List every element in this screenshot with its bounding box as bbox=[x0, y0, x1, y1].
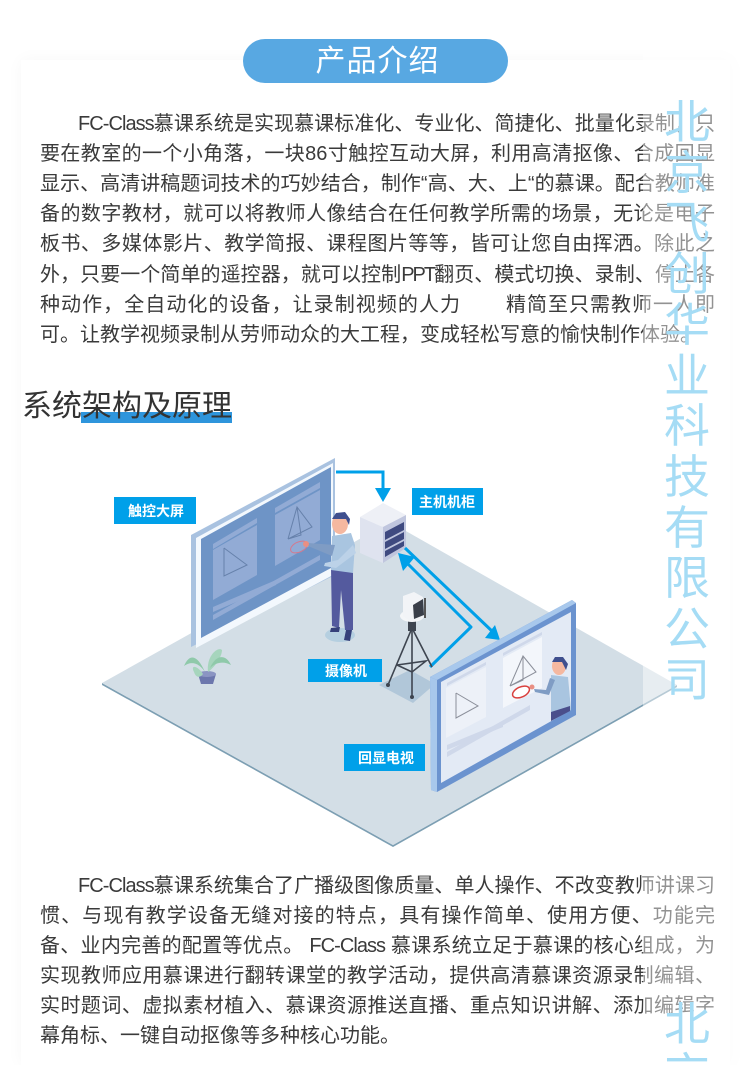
text block: system features bbox=[40, 874, 715, 1047]
watermark: vertical company name: 司 bbox=[664, 654, 710, 706]
text block: system features: 备、业内完善的配置等优点。 FC-Class 慕课系统立足于慕课的核心组成，为 bbox=[40, 935, 715, 957]
text block: product introduction: 要在教室的一个小角落，一块86寸触控互动大屏，利用高清抠像、合成回显 bbox=[40, 143, 715, 165]
text block: product introduction: 可。让教学视频录制从劳师动众的大工程，变成轻松写意的愉快制作体验。 bbox=[40, 324, 700, 346]
text block: system features: 惯、与现有教学设备无缝对接的特点，具有操作简单、使用方便、功能完 bbox=[40, 905, 715, 927]
label: host cabinet bbox=[412, 488, 483, 515]
text block: product introduction: 精简至只需教师一人即 bbox=[506, 294, 715, 316]
text block: system features: 幕角标、一键自动抠像等多种核心功能。 bbox=[40, 1025, 400, 1047]
touch screen board bbox=[191, 458, 335, 648]
text block: system features: 实现教师应用慕课进行翻转课堂的教学活动，提供高清慕课资源录制编辑、 bbox=[40, 965, 715, 987]
watermark: vertical company name: 科 bbox=[664, 400, 710, 452]
text block: product introduction: 种动作，全自动化的设备，让录制视频的人力 bbox=[40, 294, 460, 316]
label: touch screen: 触控大屏 bbox=[128, 503, 184, 519]
text block: product introduction: 显示、高清讲稿题词技术的巧妙结合，制作“高、大、上“的慕课。配合教师准 bbox=[40, 173, 715, 195]
label: host cabinet: 主机机柜 bbox=[419, 494, 475, 510]
label: display TV: 回显电视 bbox=[358, 750, 414, 766]
heading pill: product introduction: 产品介绍 bbox=[316, 45, 440, 78]
text block: system features: 实时题词、虚拟素材植入、慕课资源推送直播、重点知识讲解、添加编辑字 bbox=[40, 995, 715, 1017]
heading: system architecture and principle: 系统架构及原理 bbox=[22, 390, 232, 423]
label: display TV bbox=[344, 744, 425, 771]
text block: product introduction: 板书、多媒体影片、教学简报、课程图片等等，皆可让您自由挥洒。除此之 bbox=[40, 233, 715, 255]
watermark: vertical company name: 京 bbox=[664, 147, 710, 199]
heading underline highlight bbox=[81, 412, 232, 423]
camera on tripod bbox=[379, 592, 435, 703]
heading pill: product introduction bbox=[243, 39, 508, 83]
watermark: vertical company name: 华 bbox=[664, 299, 710, 351]
server cabinet bbox=[360, 503, 406, 563]
text block: product introduction: 外，只要一个简单的遥控器，就可以控制PPT翻页、模式切换、录制、停止各 bbox=[40, 264, 715, 286]
watermark: vertical company name: 业 bbox=[664, 350, 710, 402]
watermark: vertical company name: 飞 bbox=[664, 197, 710, 249]
arrows: server, camera and TV links bbox=[398, 548, 500, 667]
translucent fade strip on the right bbox=[643, 0, 750, 1065]
watermark: vertical company name: 限 bbox=[664, 552, 710, 604]
floor bbox=[102, 522, 677, 847]
teacher figure bbox=[303, 512, 356, 642]
arrow: board to server bbox=[336, 472, 391, 502]
label: touch screen bbox=[114, 497, 196, 524]
label: camera bbox=[308, 659, 382, 682]
watermark: vertical company name: 创 bbox=[664, 248, 710, 300]
watermark: repeated start of company name: 北 bbox=[664, 999, 710, 1050]
watermark: vertical company name bbox=[664, 97, 710, 706]
potted plant bbox=[184, 649, 231, 684]
text block: product introduction: 备的数字教材，就可以将教师人像结合在任何教学所需的场景，无论是电子 bbox=[40, 203, 715, 225]
text block: system features: FC-Class慕课系统集合了广播级图像质量、单人操作、不改变教师讲课习 bbox=[78, 875, 715, 897]
watermark: vertical company name: 北 bbox=[664, 97, 710, 148]
display TV bbox=[430, 600, 576, 792]
text block: product introduction bbox=[40, 113, 715, 346]
diagram: system architecture illustration bbox=[102, 458, 677, 847]
text block: product introduction: FC-Class慕课系统是实现慕课标准化、专业化、简捷化、批量化录制，只 bbox=[78, 113, 715, 135]
watermark: vertical company name: 公 bbox=[664, 603, 710, 655]
watermark: vertical company name: 有 bbox=[664, 502, 710, 554]
watermark: vertical company name: 技 bbox=[664, 451, 710, 503]
label: camera: 摄像机 bbox=[325, 663, 367, 679]
